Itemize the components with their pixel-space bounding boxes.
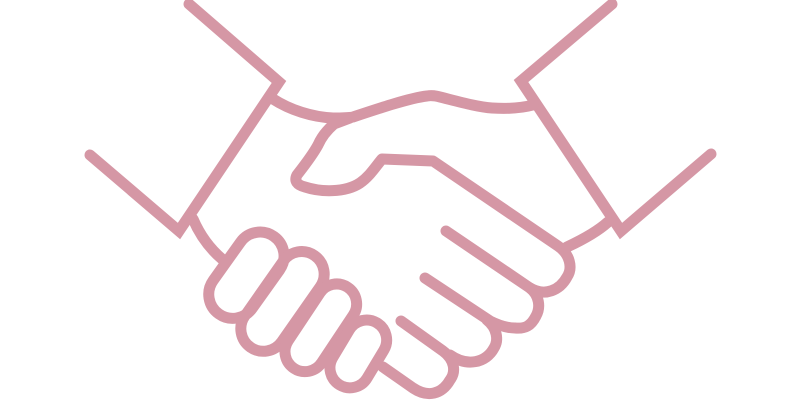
knuckle three [277,276,364,379]
knuckle one [199,223,294,328]
left wrist to top of hand [273,96,533,118]
left cuff [90,4,279,231]
finger four [383,321,454,394]
thumb and palm [296,118,570,292]
right wrist [567,222,608,247]
finger two [425,278,539,328]
finger three [450,320,497,362]
knuckle two [232,243,333,360]
left wrist lower [193,219,222,259]
knuckle four [323,313,394,395]
right cuff [521,4,711,231]
